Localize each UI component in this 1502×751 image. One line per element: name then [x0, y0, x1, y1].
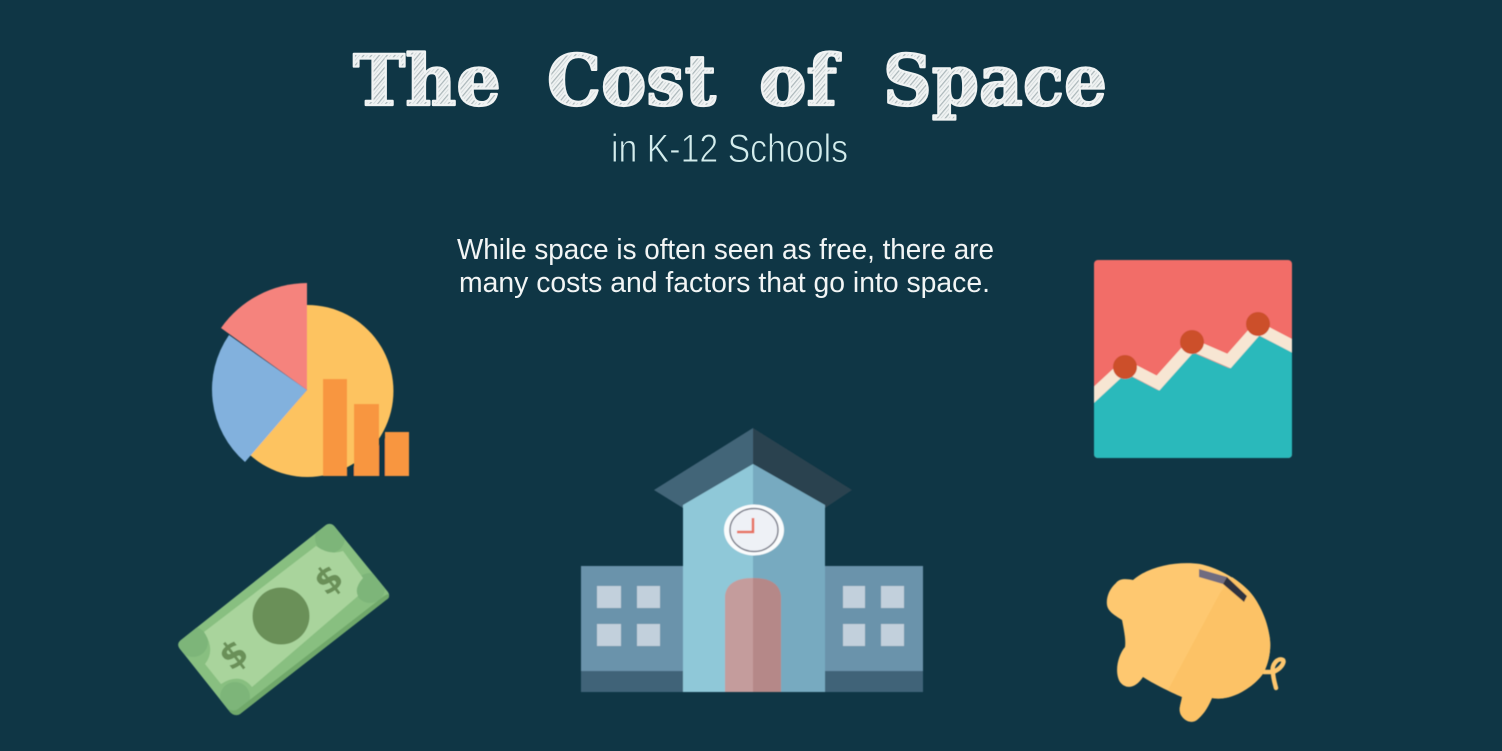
bars: [323, 379, 409, 476]
bill corner patches: [178, 523, 385, 712]
subtitle: in K-12 Schools: [611, 127, 848, 171]
icon: line chart: [1084, 260, 1302, 458]
pie slice: yellow: [250, 305, 393, 477]
center medallion: [252, 588, 310, 644]
title: Cost: [547, 39, 716, 122]
bill shadow edge: [228, 594, 389, 715]
gap behind bars: [348, 438, 385, 476]
windows: [597, 586, 904, 646]
pig body: [1107, 563, 1270, 722]
intro text: [457, 234, 994, 299]
infographic canvas: [178, 50, 1293, 723]
roof: [654, 428, 753, 508]
dollar signs: $: [211, 631, 256, 679]
teal area: [1094, 335, 1292, 458]
pie slice: blue: [212, 335, 307, 462]
title: Space: [883, 39, 1107, 122]
intro text: many costs and factors that go into space.: [459, 267, 990, 299]
icon: dollar bill: [178, 523, 389, 715]
dollar signs: $: [306, 556, 351, 604]
icon: piggy bank: [1107, 563, 1284, 722]
clock: [724, 504, 784, 556]
coin slot: [1199, 569, 1227, 584]
pie slice: pink: [221, 283, 307, 390]
tower: [683, 464, 753, 692]
data points: [1113, 355, 1137, 379]
icon: school building: [581, 428, 923, 692]
bill body: [178, 524, 389, 715]
door: [725, 578, 753, 692]
title: of: [759, 39, 841, 122]
dollar signs: [211, 556, 351, 679]
pig tail: [1264, 659, 1284, 688]
pig shaded half: [1168, 577, 1270, 722]
bill inner panel: [204, 546, 363, 687]
cream line: [1084, 328, 1302, 404]
icon: pie and bar chart: [212, 283, 409, 477]
wings: [581, 566, 683, 671]
chart background: [1094, 260, 1292, 458]
intro text: While space is often seen as free, there are: [457, 234, 994, 266]
title: The: [353, 39, 501, 122]
